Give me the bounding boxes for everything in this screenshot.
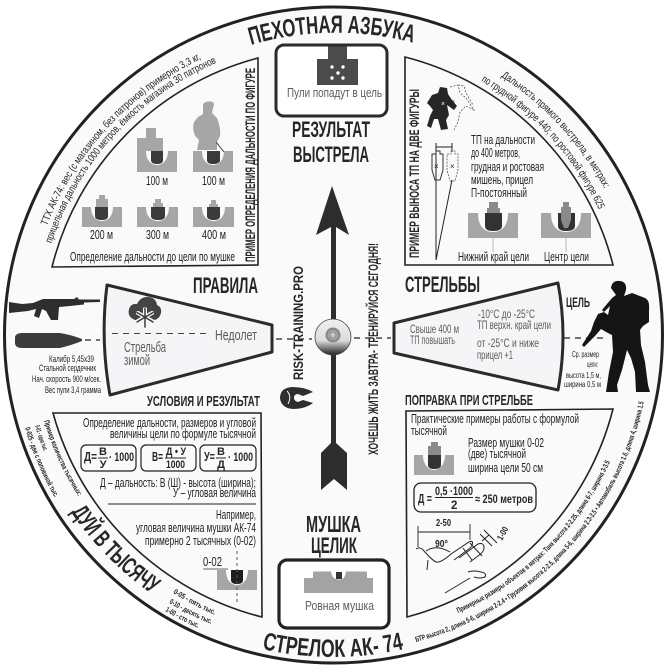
icon: sight at centre: Центр цели: [544, 250, 589, 264]
text: cartridge data: Стальной сердечник: [39, 363, 96, 373]
window: temperature correction wedge: [394, 283, 563, 390]
icon: sight at centre: [541, 202, 591, 264]
text: sight size: [468, 435, 544, 475]
text: target size: Ср. размер: [572, 349, 599, 359]
text: aiming explanation: ТП на дальности: [471, 132, 535, 147]
heading: shot result: РЕЗУЛЬТАТ: [292, 117, 370, 142]
text: aiming explanation: [471, 132, 544, 200]
text: aiming explanation: П-постоянный: [471, 185, 527, 200]
text: formula legend: У – угловая величина: [173, 485, 256, 500]
formula: range: У: [100, 459, 107, 471]
text: example: примерно 2 тысячных (0-02): [145, 533, 256, 548]
icon: target with bullet holes: [317, 46, 358, 85]
text: sight size: Размер мушки 0-02: [468, 435, 544, 450]
arc text: thousandths examples left: 0-01 - одна тыс.: [35, 425, 47, 452]
heading: shot result: [292, 117, 370, 167]
formula: 250 metres: ≈ 250 метров: [475, 492, 533, 506]
heading: conditions and result: УСЛОВИЯ И РЕЗУЛЬТАТ: [147, 393, 260, 410]
text: cartridge data: Вес пули 3,4 грамма: [45, 385, 101, 395]
diagram: hand measuring angle: [416, 518, 510, 593]
text: cartridge data: Калибр 5,45х39: [49, 354, 94, 364]
formula: angular size: [200, 445, 256, 471]
arc text: thousandths examples bottom: [165, 589, 215, 628]
icon: sight at lower edge: [458, 202, 529, 264]
icon: target 400 m: 400 м: [202, 227, 226, 242]
text: aiming explanation: грудная и ростовая: [471, 159, 544, 174]
formula: range: [81, 445, 136, 471]
icon: target 300 m: [137, 199, 178, 242]
text: practical intro: Практические примеры работы с формулой: [411, 411, 579, 426]
text: aiming explanation: мишень, прицел: [471, 172, 533, 187]
label: winter shooting: зимой: [124, 353, 150, 369]
text: temperature rules: [477, 307, 551, 362]
caption: range to target: Определение дальности до цели по мушке: [70, 250, 235, 264]
text: over 400 m: ТП повышать: [410, 335, 455, 347]
dashed centre lines: [85, 338, 608, 340]
heading: correction when shooting: ПОПРАВКА ПРИ СТРЕЛЬБЕ: [405, 392, 533, 409]
icon: cartridge bullet: [15, 333, 82, 348]
arc text: thousandths examples bottom: 0-10 - десять тыс.: [170, 599, 212, 624]
pointer: arrow tail: [321, 345, 347, 490]
panel: formula of thousandths: [53, 413, 262, 617]
formula: angular size: В: [217, 446, 225, 458]
diagram: aim offset lines: [432, 143, 458, 260]
icon: soldier silhouette: [582, 281, 650, 392]
label: website: RISK-TRAINING.PRO: [290, 266, 306, 380]
formula: height: 1000: [166, 459, 185, 471]
text: temperature rules: прицел +1: [477, 348, 513, 362]
text: example: угловая величина мушки АК-74: [136, 520, 256, 535]
diagram: aim offset lines: ×: [434, 162, 439, 171]
formula: angular size: · 1000: [228, 450, 253, 464]
arc text: thousandths examples bottom: 1-00 - сто тыс.: [165, 607, 198, 628]
text: cartridge data: Нач. скорость 900 м/сек.: [32, 374, 101, 384]
formula: height: В=: [152, 449, 163, 464]
text: formula intro: [83, 416, 256, 441]
label: aiming point: ПРИМЕР ВЫНОСА ТП НА ДВЕ ФИГУРЫ: [407, 89, 422, 258]
text: temperature rules: -10°С до -25°С: [478, 307, 535, 321]
label: slogan: ХОЧЕШЬ ЖИТЬ ЗАВТРА- ТРЕНИРУЙСЯ СЕГОДНЯ!: [366, 243, 381, 455]
formula: height: Д • У: [166, 446, 186, 458]
heading: shot result: ВЫСТРЕЛА: [293, 142, 369, 167]
heading: front sight and rear sight: МУШКА: [306, 511, 361, 537]
text: temperature rules: от -25°С и ниже: [477, 336, 539, 350]
title: bottom arc: СТРЕЛОК АК- 74: [264, 632, 404, 658]
arc text: thousandths examples bottom: 0-05 - пять тыс.: [174, 589, 215, 615]
diagram: aim offset lines: ×: [450, 162, 455, 171]
icon: soldier with dotted offset figures: ×: [441, 101, 445, 108]
arc heading: blow in thousand: ДУЙ В ТЫСЯЧУ: [67, 505, 162, 591]
arc text: object sizes: Примерные размеры объектов в метрах: Танк высота 2-2.25, длина 6-7, ширина 3-3.5: [456, 460, 610, 613]
heading: of shooting: СТРЕЛЬБЫ: [405, 272, 480, 297]
icon: soldier with dotted offset figures: [427, 85, 474, 130]
text: formula legend: Д – дальность: В (Ш) - высота (ширина);: [100, 475, 256, 490]
arc text: rifle specifications: прицельная дальность 1000 метров, ёмкость магазина 30 патронов: [46, 58, 216, 243]
text: formula intro: Определение дальности, размеров и угловой: [83, 416, 256, 430]
text: target size: [564, 349, 601, 389]
arc text: thousandths examples left: Пример количества тысячных:: [44, 420, 82, 496]
panel: aiming point on two figures: [405, 57, 613, 265]
icon: front sight 0-02: 0-02: [203, 554, 222, 569]
icon: soldier target 100 m: 100 м: [202, 173, 225, 188]
arc text: object sizes: БТР высота 2, длина 5-6, ширина 2-2.4 • Грузовик высота 2-2.5, длина 5-6, ширина 2.3-3.5 • Автомобиль высота 1.6, длина 4, ширина 1.5: [415, 401, 644, 642]
text: target size: высота 1,5 м,: [566, 370, 601, 380]
text: practical intro: [411, 411, 579, 438]
icon: soldier with dotted offset figures: ×: [451, 99, 455, 106]
formula: angular size: Д: [217, 459, 225, 471]
window: even sight: [279, 560, 389, 628]
arc text: direct shot range: Дальность прямого выстрела, в метрах:: [500, 72, 609, 188]
icon: sight at lower edge: Нижний край цели: [458, 250, 529, 264]
hub: rivet: [315, 319, 351, 355]
formula: range: Д=: [84, 449, 97, 464]
formula: 250 metres: Д =: [418, 492, 432, 506]
icon: target 200 m: 200 м: [90, 227, 113, 242]
icon: target 200 m: [82, 195, 122, 242]
icon: spartan helmet: [280, 387, 313, 409]
panel: practical examples: [406, 409, 613, 617]
icon: front sight 0-02: [203, 551, 257, 602]
text: sight size: (две) тысячной: [468, 446, 526, 461]
label: winter shooting: [124, 340, 167, 369]
heading: rules: ПРАВИЛА: [193, 273, 258, 298]
icon: target 400 m: [193, 200, 234, 242]
text: aiming explanation: до 400 метров,: [471, 145, 520, 160]
formula: angular size: У=: [204, 449, 215, 464]
text: example: [136, 507, 256, 548]
text: temperature rules: ТП верхн. край цели: [477, 318, 551, 332]
heading: front sight and rear sight: [306, 511, 361, 558]
label: winter shooting: Стрельба: [124, 340, 167, 356]
diagram: hand measuring angle: 90°: [435, 539, 448, 550]
text: formula intro: величины цели по формуле тысячной: [110, 427, 256, 441]
diagram: hand measuring angle: 1-00: [495, 525, 510, 542]
arc text: thousandths examples left: 0-025 - две с половиной тыс.: [25, 427, 57, 498]
formula: 250 metres: 2: [451, 500, 457, 512]
formula: height: [141, 445, 196, 471]
icon: soldier target 100 m: [193, 101, 233, 188]
caption: bullets hit target: Пули попадут в цель: [287, 85, 382, 100]
icon: snow cloud: [129, 297, 161, 327]
pointer: arrow head and shaft: [316, 186, 349, 320]
text: formula legend: [100, 475, 256, 500]
formula: range: · 1000: [109, 450, 134, 464]
arc text: direct shot range: по грудной фигуре 440; по ростовой фигуре 625: [482, 76, 605, 209]
label: short of target: Недолет: [215, 328, 257, 344]
icon: rifle: [9, 297, 100, 320]
text: practical intro: тысячной: [411, 423, 447, 438]
text: over 400 m: [410, 324, 459, 347]
formula: 250 metres: [414, 483, 536, 512]
title: top arc: ПЕХОТНАЯ АЗБУКА: [248, 16, 413, 45]
arc text: thousandths examples left: [25, 420, 82, 498]
formula: range: В: [99, 446, 107, 458]
text: example: Например,: [216, 507, 256, 522]
caption: even sight: Ровная мушка: [305, 598, 375, 613]
icon: chest target 100 m: 100 м: [146, 173, 168, 188]
icon: target 300 m: 300 м: [146, 227, 169, 242]
window: shot result: [276, 45, 387, 116]
window: winter shooting wedge: [104, 285, 272, 395]
text: cartridge data: [32, 354, 101, 395]
icon: front sight example: [414, 442, 454, 475]
icon: sight picture: [304, 572, 373, 593]
panel: range by figure: [52, 58, 258, 267]
arc text: rifle specifications: ТТХ АК-74: вес (с магазином, без патронов) примерно 3,3 кг,: [40, 54, 201, 224]
icon: chest target 100 m: [137, 128, 177, 188]
text: over 400 m: Свыше 400 м: [410, 324, 459, 336]
text: target size: цели:: [587, 359, 598, 369]
diagram: hand measuring angle: 2-50: [436, 518, 451, 529]
heading: front sight and rear sight: ЦЕЛИК: [311, 533, 357, 558]
heading: target: ЦЕЛЬ: [566, 294, 590, 310]
text: sight size: ширина цели 50 см: [468, 460, 543, 475]
formula: 250 metres: 0,5 ·1000: [435, 486, 473, 498]
text: target size: ширина 0,5 м: [564, 379, 601, 389]
